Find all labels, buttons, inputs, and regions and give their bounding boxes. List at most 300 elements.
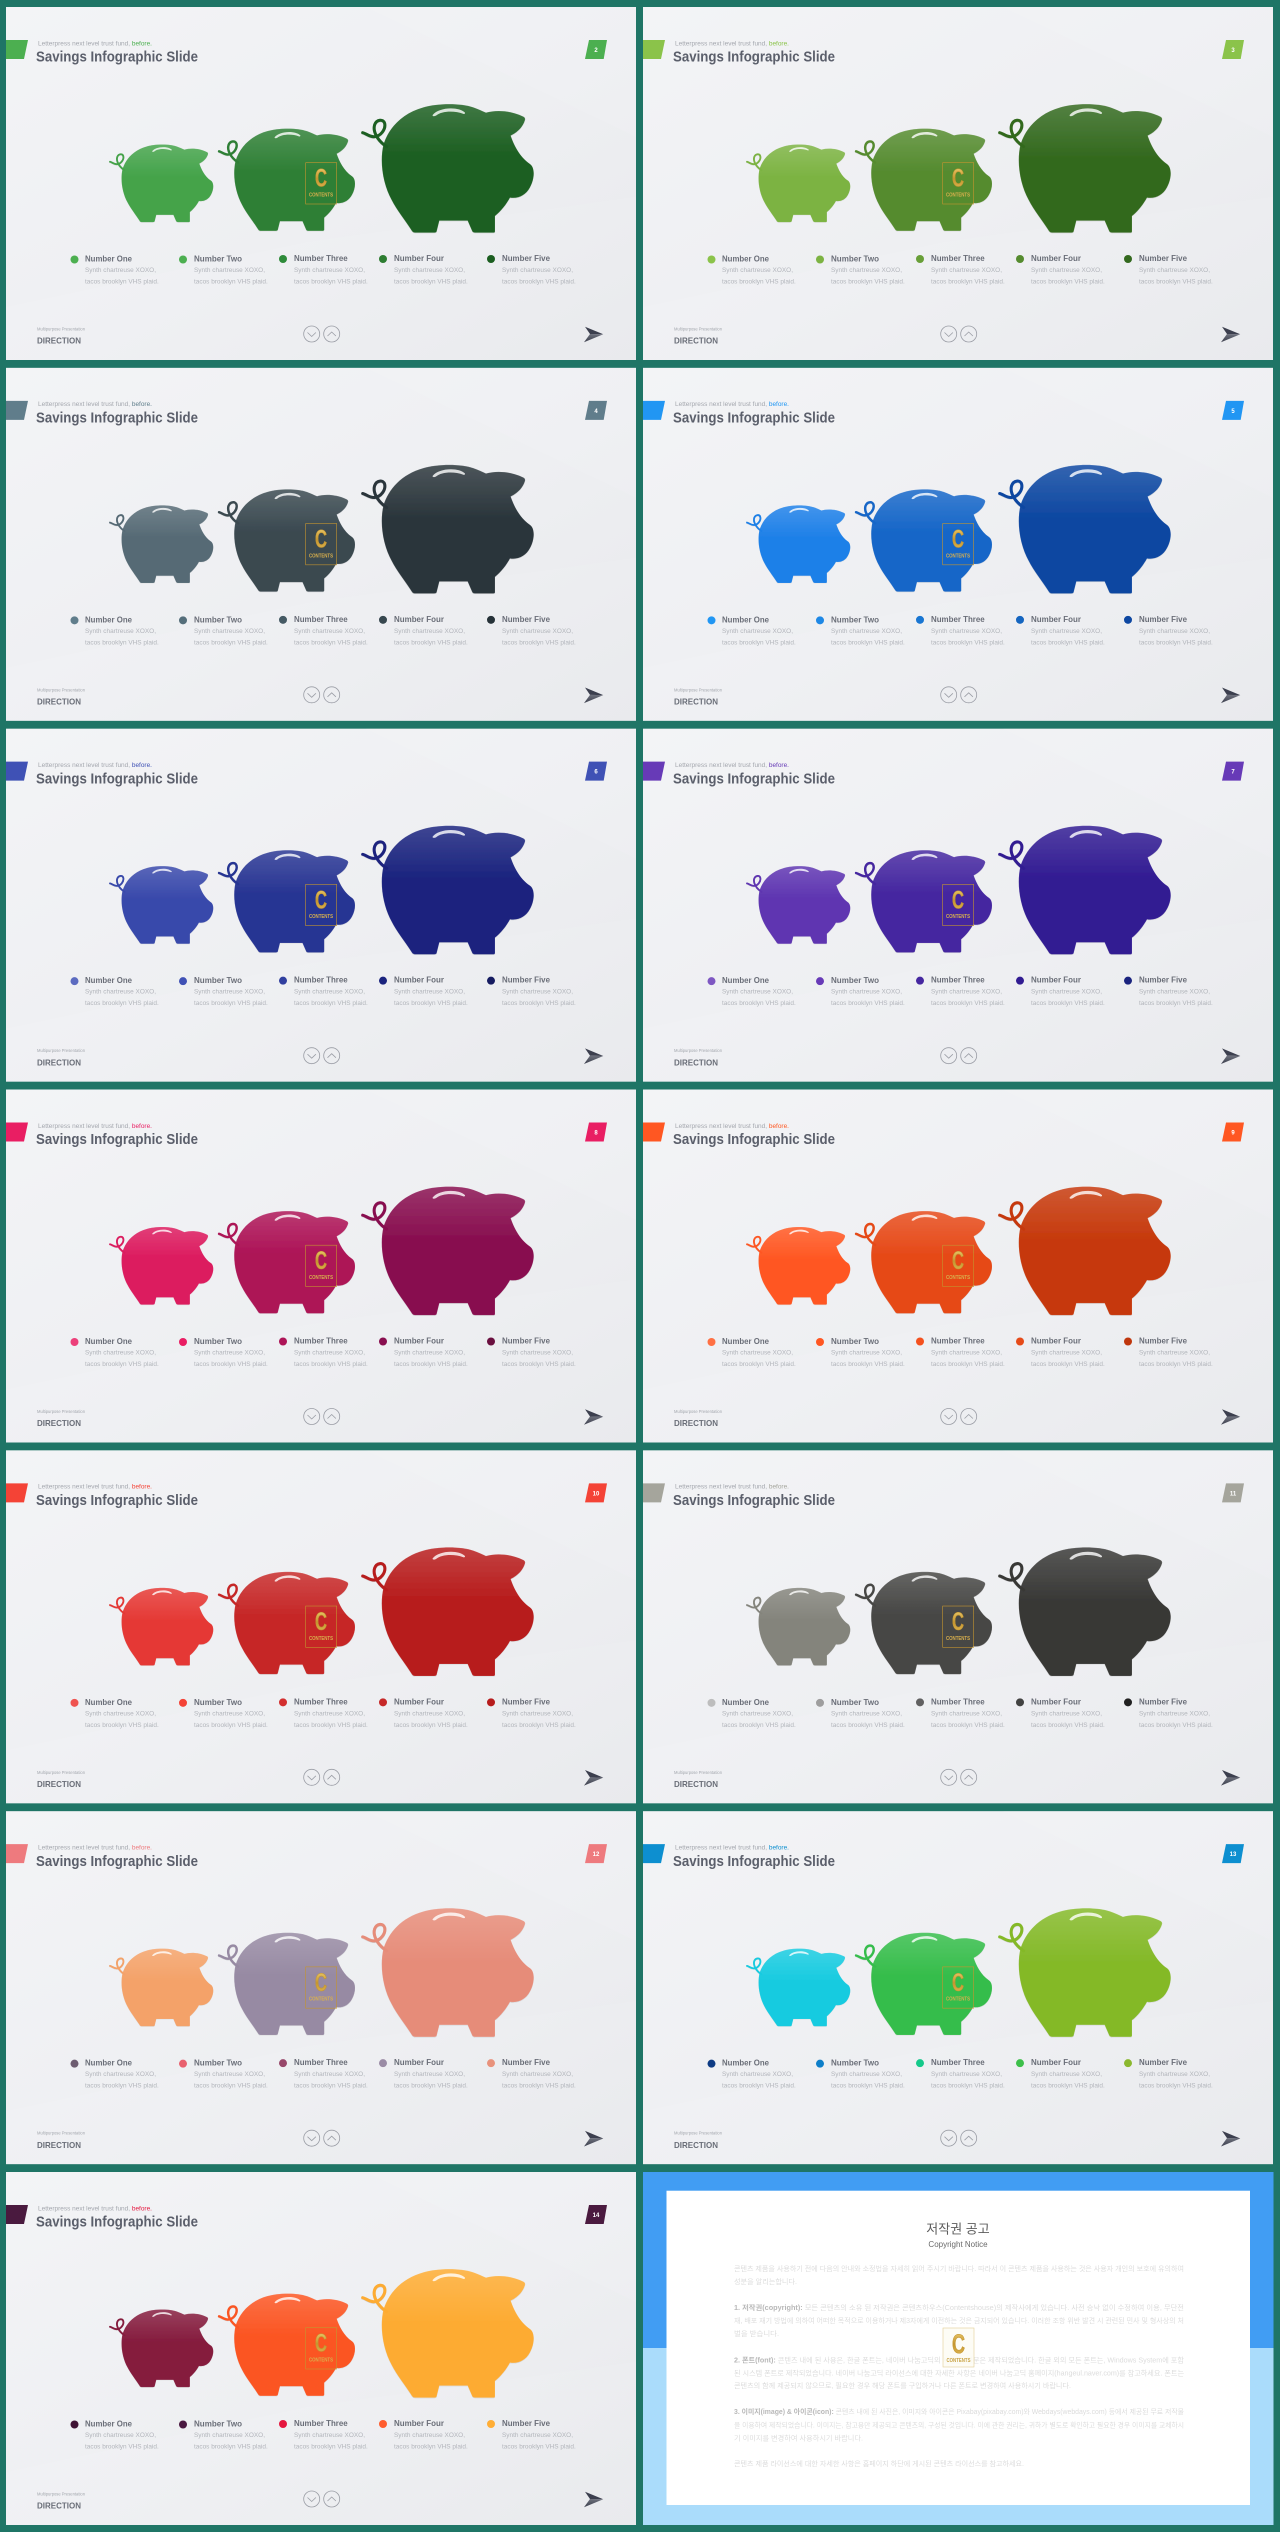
legend two: Synth chartreuse XOXO,: [194, 267, 265, 274]
pig small: [747, 1588, 850, 1665]
watermark logo: [943, 2328, 974, 2367]
legend one: tacos brooklyn VHS plaid.: [722, 1000, 796, 1007]
legend four: Synth chartreuse XOXO,: [394, 1710, 465, 1717]
page number: 9: [1231, 1130, 1235, 1136]
legend two: Number Two: [831, 975, 879, 985]
header tag: [643, 1122, 665, 1142]
legend two: tacos brooklyn VHS plaid.: [194, 639, 268, 646]
legend one: Synth chartreuse XOXO,: [722, 2071, 793, 2078]
slide 11: grey: [643, 1450, 1273, 1803]
legend five: [1124, 253, 1213, 286]
footer label: [37, 1409, 85, 1428]
legend two: tacos brooklyn VHS plaid.: [831, 278, 905, 286]
footer label: DIRECTION: [674, 1779, 718, 1789]
legend one: Synth chartreuse XOXO,: [85, 1350, 156, 1356]
page number: 4: [594, 409, 598, 415]
legend three: [279, 1696, 368, 1729]
title: Savings Infographic Slide: [673, 1492, 835, 1509]
navigation buttons: [304, 1769, 340, 1785]
legend one: [70, 614, 159, 646]
pig medium: [219, 1933, 355, 2035]
page number: [585, 40, 607, 59]
slide 13: cyan to lime: [643, 1811, 1273, 2164]
legend two: [816, 975, 905, 1007]
legend two: [179, 1336, 268, 1368]
legend four: Synth chartreuse XOXO,: [1031, 267, 1102, 274]
navigation buttons: [941, 1408, 977, 1424]
legend three: tacos brooklyn VHS plaid.: [294, 639, 368, 646]
pig medium: [219, 1211, 355, 1313]
legend five: Number Five: [1139, 614, 1187, 624]
legend one: Synth chartreuse XOXO,: [85, 628, 156, 635]
navigation buttons: [304, 1408, 340, 1424]
legend two: tacos brooklyn VHS plaid.: [194, 1361, 268, 1368]
title: Savings Infographic Slide: [36, 49, 198, 66]
page number: [585, 1122, 607, 1142]
page number: [1222, 1122, 1244, 1142]
pig small: [110, 866, 213, 944]
legend one: tacos brooklyn VHS plaid.: [85, 2444, 159, 2450]
watermark logo: C: [952, 1247, 964, 1275]
legend two: Synth chartreuse XOXO,: [194, 628, 265, 635]
legend three: Synth chartreuse XOXO,: [931, 1350, 1002, 1356]
footer label: [37, 1770, 85, 1789]
notice heading: 저작권 공고: [926, 2222, 990, 2236]
legend five: Number Five: [502, 975, 550, 985]
watermark logo: [943, 524, 974, 565]
notice subheading: Copyright Notice: [928, 2240, 988, 2249]
watermark logo: [306, 524, 337, 565]
slide background: [6, 1450, 636, 1803]
legend one: tacos brooklyn VHS plaid.: [722, 2083, 796, 2090]
legend four: Number Four: [394, 614, 445, 624]
subtitle: Letterpress next level trust fund, before.: [38, 401, 152, 408]
legend two: Synth chartreuse XOXO,: [831, 1350, 902, 1356]
legend one: tacos brooklyn VHS plaid.: [722, 1722, 796, 1729]
watermark logo: CONTENTS: [946, 1636, 971, 1642]
icon: paper plane: [1221, 327, 1240, 342]
legend one: Synth chartreuse XOXO,: [722, 1350, 793, 1356]
icon: paper plane: [584, 1770, 603, 1786]
footer label: Multipurpose Presentation: [674, 687, 722, 692]
legend four: tacos brooklyn VHS plaid.: [1031, 639, 1105, 646]
legend five: Number Five: [502, 1696, 550, 1706]
legend three: [916, 1336, 1005, 1368]
legend three: tacos brooklyn VHS plaid.: [294, 1361, 368, 1368]
watermark logo: [306, 1606, 337, 1647]
watermark logo: CONTENTS: [946, 914, 971, 920]
pig small: [110, 2309, 213, 2387]
legend four: Number Four: [1031, 614, 1082, 624]
legend two: Synth chartreuse XOXO,: [831, 267, 902, 274]
legend three: Synth chartreuse XOXO,: [294, 2432, 365, 2439]
legend one: tacos brooklyn VHS plaid.: [722, 639, 796, 646]
legend four: Number Four: [394, 2057, 445, 2067]
page number: [1222, 40, 1244, 59]
legend five: Number Five: [502, 2057, 550, 2067]
legend five: tacos brooklyn VHS plaid.: [1139, 1722, 1213, 1729]
legend five: [487, 253, 576, 286]
subtitle: Letterpress next level trust fund, before.: [38, 40, 152, 47]
legend three: Number Three: [294, 2418, 348, 2428]
page number: 14: [593, 2213, 600, 2219]
legend four: tacos brooklyn VHS plaid.: [394, 1361, 468, 1368]
legend three: Number Three: [931, 1336, 985, 1346]
legend three: Number Three: [931, 614, 985, 624]
legend five: Number Five: [502, 1336, 550, 1346]
legend three: Synth chartreuse XOXO,: [931, 989, 1002, 996]
legend three: [279, 975, 368, 1007]
legend four: [379, 2418, 468, 2450]
legend two: [179, 2418, 268, 2450]
footer label: DIRECTION: [37, 336, 81, 346]
watermark logo: C: [315, 526, 327, 554]
legend three: Number Three: [931, 2057, 985, 2067]
legend five: tacos brooklyn VHS plaid.: [502, 1361, 576, 1368]
footer label: Multipurpose Presentation: [37, 326, 85, 332]
legend five: tacos brooklyn VHS plaid.: [502, 1722, 576, 1729]
legend five: Synth chartreuse XOXO,: [502, 2071, 573, 2078]
copyright paragraph: 1. 저작권(copyright): 모든 콘텐츠의 소유 된 저작권은 콘텐츠하우스(Contentshouse)의 제작사에게 있습니다. 사전 승낙 없이 수정하여 이용, 무단전: [734, 2303, 1184, 2312]
legend one: Number One: [722, 2058, 769, 2068]
slide background: [6, 7, 636, 360]
navigation buttons: [304, 2130, 340, 2146]
watermark logo: [306, 884, 337, 926]
slide 6: indigo: [6, 729, 636, 1082]
legend one: [70, 1336, 159, 1368]
icon: paper plane: [1221, 1048, 1240, 1064]
watermark logo: CONTENTS: [309, 2358, 334, 2364]
legend five: [1124, 1696, 1213, 1729]
title: Savings Infographic Slide: [673, 1131, 835, 1148]
font paragraph: 된 시스템 폰트로 제작되었습니다. 네이버 나눔고딕 라이선스에 대한 자세한 사항은 네이버 나눔고딕 홈페이지(hangeul.naver.com)를 참고하세요. 폰트는: [734, 2368, 1185, 2378]
legend three: Synth chartreuse XOXO,: [931, 1710, 1002, 1717]
subtitle: Letterpress next level trust fund, before.: [675, 401, 789, 408]
legend one: tacos brooklyn VHS plaid.: [85, 278, 159, 286]
pig small: [110, 1949, 213, 2026]
navigation buttons: [304, 2491, 340, 2507]
watermark logo: [943, 884, 974, 926]
light blue background bottom: [643, 2348, 1274, 2525]
footer label: DIRECTION: [37, 1057, 81, 1067]
legend five: Synth chartreuse XOXO,: [502, 267, 573, 274]
pig large: [1000, 465, 1171, 593]
legend two: [816, 1697, 905, 1729]
legend three: tacos brooklyn VHS plaid.: [931, 639, 1005, 646]
legend two: tacos brooklyn VHS plaid.: [194, 1722, 268, 1729]
legend one: Number One: [722, 614, 769, 624]
legend five: tacos brooklyn VHS plaid.: [502, 2444, 576, 2450]
pig large: [1000, 1547, 1171, 1676]
legend four: Synth chartreuse XOXO,: [1031, 1350, 1102, 1356]
legend five: tacos brooklyn VHS plaid.: [1139, 1000, 1213, 1007]
legend three: Synth chartreuse XOXO,: [294, 989, 365, 996]
legend three: Number Three: [294, 975, 348, 985]
legend five: [487, 975, 576, 1007]
legend four: Synth chartreuse XOXO,: [1031, 989, 1102, 996]
navigation buttons: [304, 326, 340, 342]
legend one: tacos brooklyn VHS plaid.: [85, 639, 159, 646]
pig small: [110, 144, 213, 222]
legend three: [279, 2057, 368, 2090]
legend four: Number Four: [394, 1696, 445, 1706]
navigation buttons: [941, 687, 977, 703]
footer label: [674, 1409, 722, 1428]
legend two: tacos brooklyn VHS plaid.: [194, 2444, 268, 2450]
legend two: [179, 254, 268, 286]
legend three: Synth chartreuse XOXO,: [294, 1350, 365, 1356]
footer label: DIRECTION: [674, 336, 718, 346]
watermark logo: CONTENTS: [309, 1275, 334, 1281]
pig medium: [219, 129, 355, 231]
legend four: tacos brooklyn VHS plaid.: [394, 2083, 468, 2090]
page number: [1222, 762, 1244, 781]
subtitle: Letterpress next level trust fund, before.: [38, 1123, 152, 1130]
legend four: tacos brooklyn VHS plaid.: [394, 1000, 468, 1007]
legend three: tacos brooklyn VHS plaid.: [294, 2083, 368, 2090]
copyright paragraph: [734, 2303, 1184, 2338]
legend four: [1016, 253, 1105, 286]
page number: [1222, 401, 1244, 420]
legend five: [487, 614, 576, 646]
blue background top: [643, 2172, 1274, 2348]
icon: paper plane: [1221, 1409, 1240, 1425]
legend two: Number Two: [831, 254, 879, 264]
legend four: [1016, 614, 1105, 646]
pig large: [1000, 826, 1171, 954]
legend four: Synth chartreuse XOXO,: [394, 267, 465, 274]
icon: paper plane: [584, 1409, 603, 1425]
legend three: [916, 1696, 1005, 1729]
watermark logo: CONTENTS: [309, 1997, 334, 2003]
legend five: Number Five: [502, 2418, 550, 2428]
slide 2: green: [6, 7, 636, 360]
pig medium: [219, 489, 355, 592]
subtitle: Letterpress next level trust fund, before.: [675, 1123, 789, 1130]
slide background: [643, 7, 1273, 360]
legend three: Synth chartreuse XOXO,: [294, 2071, 365, 2078]
footer label: Multipurpose Presentation: [37, 1048, 85, 1053]
page number: [585, 2205, 607, 2224]
pig medium: [856, 129, 992, 231]
slide 9: deep orange: [643, 1090, 1273, 1442]
legend three: [916, 614, 1005, 646]
legend two: Synth chartreuse XOXO,: [194, 2432, 265, 2439]
legend three: [916, 975, 1005, 1007]
legend two: [179, 1697, 268, 1729]
legend four: tacos brooklyn VHS plaid.: [394, 1722, 468, 1729]
legend one: [708, 614, 796, 646]
legend five: Synth chartreuse XOXO,: [1139, 267, 1210, 274]
legend two: Number Two: [194, 1697, 242, 1707]
legend one: tacos brooklyn VHS plaid.: [85, 2083, 159, 2090]
legend one: tacos brooklyn VHS plaid.: [722, 278, 796, 286]
slide 7: deep purple: [643, 729, 1273, 1082]
subtitle: Letterpress next level trust fund, before.: [675, 762, 789, 769]
page number: 10: [593, 1491, 600, 1497]
legend one: Number One: [85, 2058, 132, 2068]
footer label: DIRECTION: [37, 697, 81, 707]
legend five: Number Five: [1139, 975, 1187, 985]
page number: 13: [1230, 1852, 1237, 1858]
title: Savings Infographic Slide: [673, 770, 835, 787]
watermark logo: [943, 1967, 974, 2008]
legend two: Number Two: [194, 975, 242, 985]
footer label: DIRECTION: [674, 1057, 718, 1067]
title: Savings Infographic Slide: [36, 2214, 198, 2231]
legend four: Number Four: [1031, 253, 1082, 263]
footer label: Multipurpose Presentation: [37, 2131, 85, 2136]
navigation buttons: [941, 326, 977, 342]
legend four: Synth chartreuse XOXO,: [394, 2432, 465, 2439]
legend three: [916, 253, 1005, 286]
slide 5: blue: [643, 368, 1273, 721]
legend three: Number Three: [931, 1696, 985, 1706]
legend two: Synth chartreuse XOXO,: [831, 1710, 902, 1717]
legend five: Synth chartreuse XOXO,: [1139, 989, 1210, 996]
legend two: tacos brooklyn VHS plaid.: [831, 2083, 905, 2090]
footer label: [674, 326, 722, 346]
navigation buttons: [304, 687, 340, 703]
slide background: [643, 1811, 1273, 2164]
header tag: [643, 762, 665, 781]
legend four: tacos brooklyn VHS plaid.: [394, 2444, 468, 2450]
watermark logo: C: [315, 165, 327, 193]
legend two: Synth chartreuse XOXO,: [831, 2071, 902, 2078]
legend two: tacos brooklyn VHS plaid.: [194, 2083, 268, 2090]
pig large: [363, 104, 534, 233]
legend three: [279, 614, 368, 646]
slide 4: blue grey: [6, 368, 636, 721]
footer label: DIRECTION: [37, 2501, 81, 2511]
legend two: tacos brooklyn VHS plaid.: [831, 639, 905, 646]
legend five: Number Five: [502, 253, 550, 263]
legend four: Synth chartreuse XOXO,: [1031, 1710, 1102, 1717]
footer label: [37, 687, 85, 707]
footer label: [37, 326, 85, 346]
pig large: [1000, 1187, 1171, 1315]
legend two: [816, 1336, 905, 1368]
slide 3: light green: [643, 7, 1273, 360]
legend four: tacos brooklyn VHS plaid.: [1031, 1000, 1105, 1007]
image paragraph: 기 이미지를 변경하여 사용하시기 바랍니다.: [734, 2434, 863, 2442]
footer label: Multipurpose Presentation: [37, 1770, 85, 1775]
header tag: [643, 401, 665, 420]
footer label: DIRECTION: [37, 1418, 81, 1428]
legend one: [70, 2418, 159, 2450]
legend one: Synth chartreuse XOXO,: [85, 267, 156, 274]
legend two: Number Two: [831, 614, 879, 624]
legend five: [1124, 975, 1213, 1007]
footer label: DIRECTION: [37, 2140, 81, 2150]
footer label: Multipurpose Presentation: [37, 2492, 85, 2496]
legend four: Synth chartreuse XOXO,: [394, 989, 465, 996]
watermark logo: [306, 1245, 337, 1286]
legend two: Number Two: [194, 614, 242, 624]
header tag: [6, 1122, 28, 1142]
page number: 11: [1230, 1491, 1237, 1497]
watermark logo: C: [315, 1247, 327, 1275]
page number: 2: [594, 48, 598, 54]
legend four: Number Four: [394, 2418, 445, 2428]
legend three: Synth chartreuse XOXO,: [294, 1710, 365, 1717]
legend one: [70, 2058, 159, 2090]
legend three: Number Three: [294, 1696, 348, 1706]
legend four: [1016, 1336, 1105, 1368]
slide background: [6, 2172, 636, 2525]
pig small: [747, 505, 850, 583]
legend four: [379, 2057, 468, 2090]
watermark logo: CONTENTS: [946, 1997, 971, 2003]
subtitle: Letterpress next level trust fund, before.: [38, 1484, 152, 1491]
title: Savings Infographic Slide: [673, 410, 835, 427]
pig medium: [856, 850, 992, 952]
legend four: Number Four: [1031, 1336, 1082, 1346]
legend five: tacos brooklyn VHS plaid.: [502, 1000, 576, 1007]
legend four: Synth chartreuse XOXO,: [1031, 628, 1102, 635]
legend two: Number Two: [194, 2418, 242, 2428]
legend one: Synth chartreuse XOXO,: [722, 989, 793, 996]
subtitle: Letterpress next level trust fund, before.: [675, 1844, 789, 1851]
legend five: Synth chartreuse XOXO,: [1139, 2071, 1210, 2078]
slide 14: plum to amber: [6, 2172, 636, 2525]
watermark logo: [306, 2328, 337, 2369]
legend four: [379, 253, 468, 286]
legend three: [279, 1336, 368, 1368]
legend three: Number Three: [294, 1336, 348, 1346]
pig medium: [856, 1933, 992, 2035]
watermark logo: CONTENTS: [309, 553, 334, 559]
pig small: [110, 505, 213, 583]
legend two: Number Two: [831, 2058, 879, 2068]
legend three: tacos brooklyn VHS plaid.: [294, 1722, 368, 1729]
slide background: [643, 1450, 1273, 1803]
legend five: Synth chartreuse XOXO,: [1139, 1350, 1210, 1356]
legend three: Synth chartreuse XOXO,: [931, 2071, 1002, 2078]
icon: paper plane: [584, 2131, 603, 2146]
watermark logo: C: [952, 886, 964, 914]
legend five: Synth chartreuse XOXO,: [1139, 628, 1210, 635]
legend three: [279, 253, 368, 286]
legend five: [1124, 1336, 1213, 1368]
footer label: [37, 2131, 85, 2150]
watermark logo: [306, 163, 337, 204]
legend four: [379, 614, 468, 646]
legend three: tacos brooklyn VHS plaid.: [294, 2444, 368, 2450]
pig large: [363, 465, 534, 593]
header tag: [6, 401, 28, 420]
legend five: tacos brooklyn VHS plaid.: [502, 639, 576, 646]
font paragraph: [734, 2356, 1185, 2390]
legend one: [70, 975, 159, 1007]
legend one: Number One: [85, 1336, 132, 1346]
legend two: [816, 254, 905, 286]
legend four: [379, 975, 468, 1007]
title: Savings Infographic Slide: [36, 1853, 198, 1870]
legend five: Number Five: [502, 614, 550, 624]
pig medium: [856, 489, 992, 592]
slide background: [643, 368, 1273, 721]
watermark logo: [943, 1606, 974, 1647]
legend two: Synth chartreuse XOXO,: [194, 1350, 265, 1356]
slide 8: pink: [6, 1090, 636, 1442]
legend two: [179, 975, 268, 1007]
pig large: [1000, 1908, 1171, 2037]
legend three: Synth chartreuse XOXO,: [931, 628, 1002, 635]
legend two: Number Two: [194, 1336, 242, 1346]
legend one: Synth chartreuse XOXO,: [85, 1710, 156, 1717]
watermark logo: [943, 163, 974, 204]
